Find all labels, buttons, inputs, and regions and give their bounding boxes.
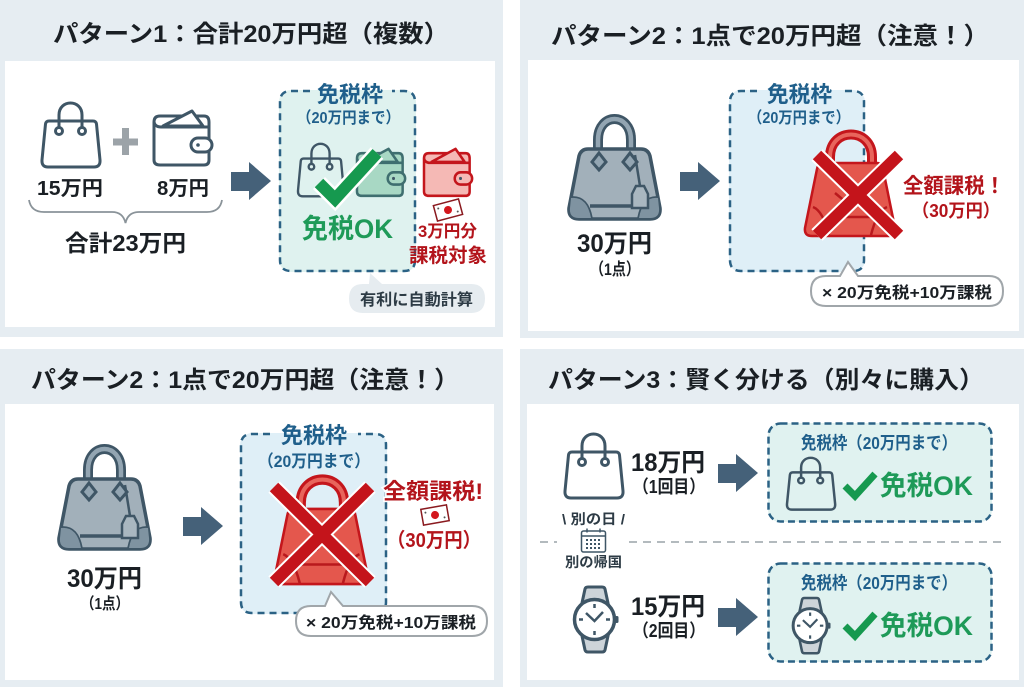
- panel: pattern 1: [0, 0, 503, 337]
- label: 免税OK: 免税OK: [302, 214, 393, 244]
- frame: second purchase: [768, 563, 992, 662]
- label: 30万円: （30万円）: [912, 201, 1000, 221]
- price: 15万円: 15万円: [631, 593, 705, 621]
- icon: check mark: [845, 474, 875, 496]
- price: 8万円: 8万円: [157, 178, 209, 200]
- price: 18万円: 18万円: [631, 449, 705, 477]
- callout: auto calculation: [349, 273, 485, 313]
- label: 別の帰国: 別の帰国: [565, 554, 622, 570]
- icon: shopping bag: [42, 103, 100, 167]
- label: 免税OK: 免税OK: [880, 471, 973, 501]
- tax-free frame: [729, 82, 865, 272]
- icon: watch in frame: [793, 598, 831, 653]
- icon: banknote: [433, 199, 463, 221]
- icon: red wallet: [424, 149, 472, 196]
- note: first purchase: （1回目）: [633, 477, 705, 497]
- panel: pattern 2 repeated: [0, 349, 503, 687]
- callout: not split: [811, 262, 1003, 306]
- icon: red bag: [805, 134, 895, 236]
- icon: check mark: [845, 614, 875, 636]
- price: 30万円: 30万円: [67, 565, 142, 593]
- heading: pattern 3: パターン3：賢く分ける（別々に購入）: [548, 367, 984, 394]
- label: 全額課税: 全額課税!: [383, 479, 483, 504]
- icon: bag in frame: [787, 458, 835, 510]
- icon: watch: [574, 587, 618, 652]
- label: 課税対象: 課税対象: [409, 245, 487, 267]
- arrow: [231, 162, 271, 200]
- heading: pattern 2: パターン2：1点で20万円超（注意！）: [551, 23, 989, 50]
- callout: not split: × 20万免税+10万課税: [306, 613, 476, 632]
- icon: wallet in frame: [357, 149, 405, 196]
- frame title: 免税枠（20万円まで）: [801, 573, 957, 593]
- label: 免税OK: 免税OK: [880, 611, 973, 641]
- icon: red bag: [275, 480, 368, 584]
- label: 全額課税: 全額課税！: [903, 175, 1005, 198]
- price: 15万円: 15万円: [37, 178, 103, 200]
- icon: shopping bag: [565, 434, 623, 498]
- tax-free frame: [240, 423, 387, 614]
- callout: auto calculation: 有利に自動計算: [360, 290, 473, 309]
- icon: cross: [274, 487, 370, 582]
- icon: plus: [113, 128, 138, 155]
- total: 合計23万円: 合計23万円: [65, 230, 186, 256]
- arrow: [718, 454, 758, 492]
- icon: wallet: [154, 111, 212, 165]
- callout: not split: [296, 592, 487, 636]
- heading: pattern 1: パターン1：合計20万円超（複数）: [53, 21, 449, 48]
- frame limit: （20万円まで）: [258, 452, 370, 471]
- frame title: 免税枠: [317, 82, 383, 107]
- arrow: [718, 598, 758, 636]
- icon: calendar: [582, 528, 606, 552]
- note: second purchase: （2回目）: [633, 621, 705, 641]
- frame title: 免税枠: [281, 423, 347, 448]
- frame title: 免税枠（20万円まで）: [801, 433, 957, 453]
- separator: [540, 541, 1002, 543]
- label: 3万円分: 3万円分: [418, 222, 477, 241]
- price: 30万円: 30万円: [577, 230, 652, 258]
- tax-free frame: [279, 82, 416, 272]
- arrow: [183, 507, 223, 545]
- frame limit: （20万円まで）: [297, 109, 400, 127]
- heading: pattern 2 repeated: パターン2：1点で20万円超（注意！）: [31, 367, 459, 394]
- note: 1点: （1点）: [81, 594, 129, 613]
- icon: cross: [817, 155, 899, 235]
- icon: check mark: [319, 153, 377, 199]
- label: 30万円: （30万円）: [387, 529, 481, 552]
- frame: first purchase: [768, 423, 992, 522]
- note: 1点: （1点）: [590, 260, 640, 279]
- panel: pattern 3: [520, 349, 1024, 687]
- frame limit: （20万円まで）: [748, 109, 850, 127]
- arrow: [680, 162, 720, 200]
- icon: bag in frame: [298, 144, 344, 196]
- icon: handbag: [59, 449, 150, 549]
- panel: pattern 2: [520, 0, 1024, 338]
- label: 別の日: \ 別の日 /: [562, 511, 625, 527]
- callout: not split: × 20万免税+10万課税: [822, 283, 992, 302]
- icon: handbag: [569, 119, 660, 219]
- brace: [29, 200, 222, 223]
- frame title: 免税枠: [767, 82, 832, 107]
- icon: banknote: [421, 505, 449, 525]
